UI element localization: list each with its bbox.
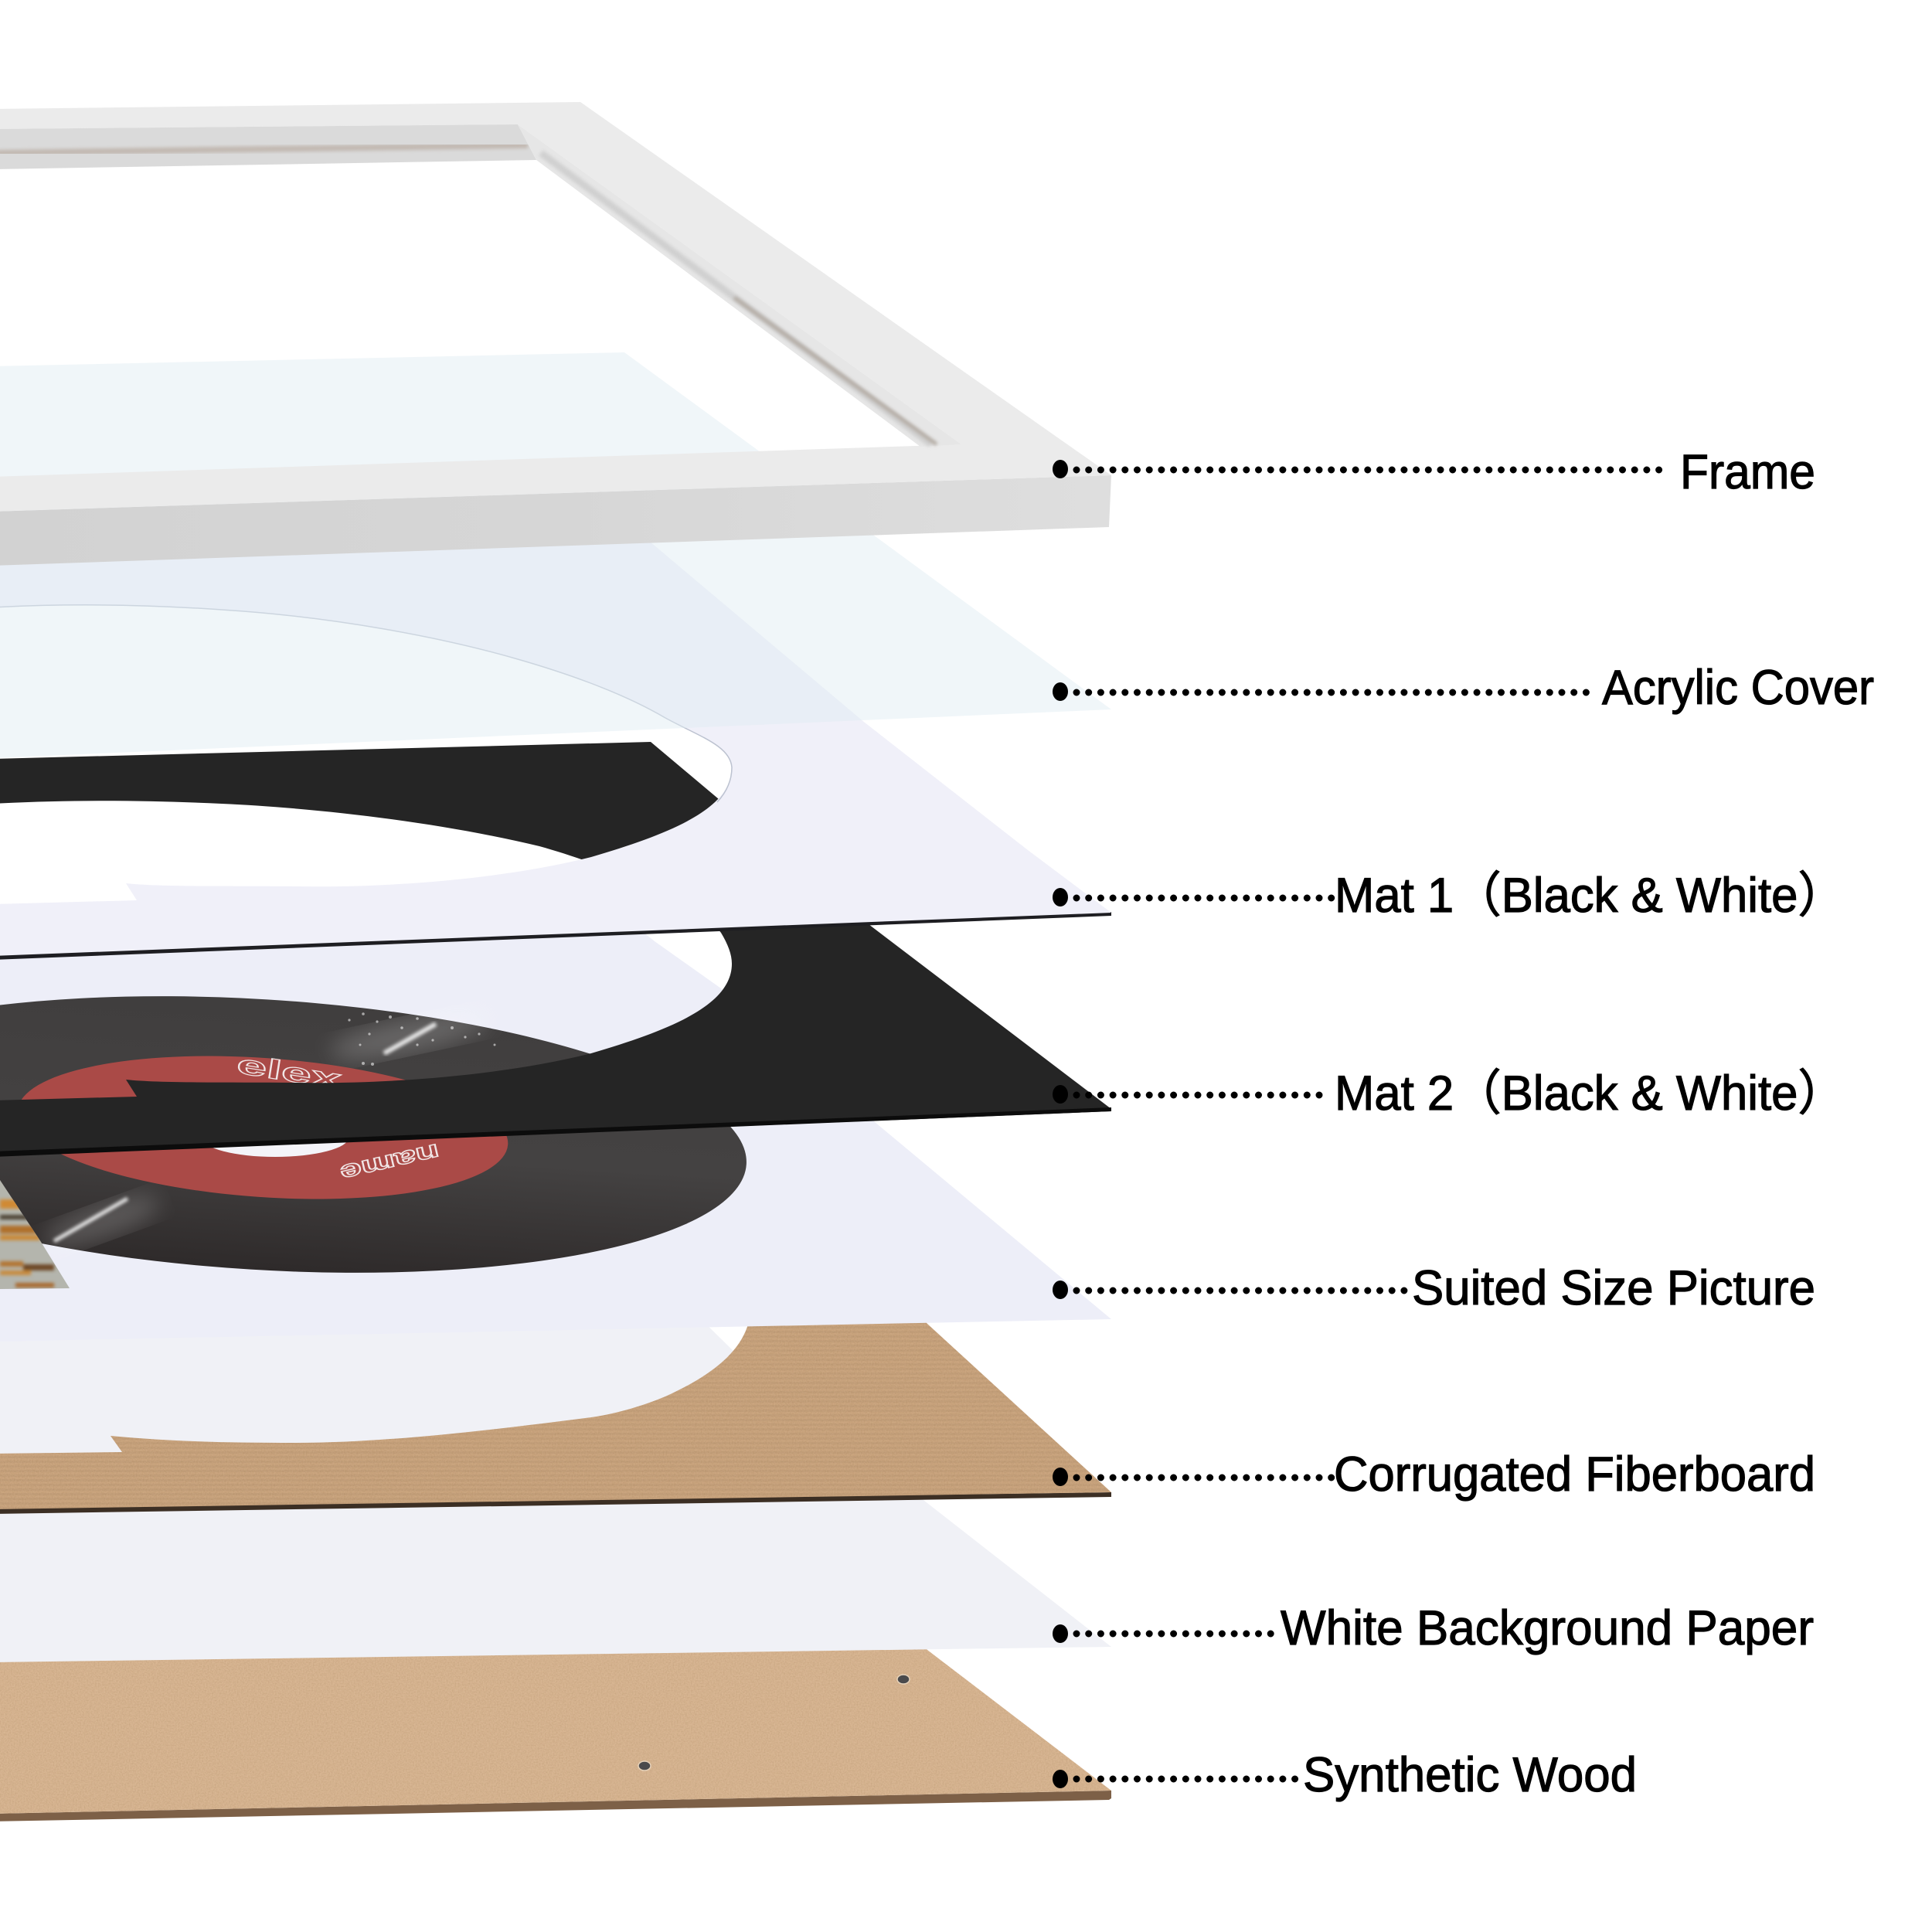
frame top face	[0, 102, 1111, 512]
icon: screw hole right	[897, 1675, 910, 1684]
panel: frame	[0, 102, 1111, 566]
marker dot	[1053, 1770, 1068, 1788]
callout: Corrugated Fiberboard	[1053, 1447, 1815, 1502]
record red label	[12, 1041, 513, 1214]
mat 2 lower edge	[0, 1107, 1111, 1157]
label: Mat 1（Black & White）	[1335, 869, 1845, 923]
panel: mat 1 white	[0, 532, 1111, 960]
label: Frame	[1680, 445, 1815, 499]
marker dot	[1053, 460, 1068, 478]
frame inner lip top	[0, 124, 536, 169]
frame front side	[0, 475, 1111, 566]
record top speckles	[348, 1012, 496, 1066]
corrugated edge	[0, 1492, 1111, 1514]
label: Synthetic Wood	[1303, 1748, 1637, 1802]
wood board side edge	[0, 1791, 1111, 1821]
callout: White Background Paper	[1053, 1601, 1814, 1655]
panel: corrugated fiberboard	[0, 1298, 1111, 1514]
icon: screw hole centre	[638, 1761, 651, 1770]
label: Suited Size Picture	[1412, 1261, 1815, 1315]
record top glare	[327, 1002, 492, 1069]
panel: synthetic wood backing board	[0, 1619, 1111, 1821]
photo mottled bands	[0, 1199, 54, 1287]
callout: Acrylic Cover	[1053, 661, 1874, 715]
corrugation ribs	[0, 1298, 1111, 1509]
corrugated face with window	[0, 1298, 1111, 1509]
leader	[1077, 1631, 1275, 1637]
label: White Background Paper	[1281, 1601, 1814, 1655]
record bottom glare	[36, 1185, 165, 1260]
record centre hole	[202, 1118, 349, 1157]
frame inner lip right grey band	[541, 153, 931, 444]
marker dot	[1053, 1468, 1068, 1486]
label: Corrugated Fiberboard	[1334, 1447, 1815, 1502]
leader	[1077, 1475, 1335, 1481]
frame inner lip right	[518, 124, 961, 447]
mat 1 underside line	[0, 912, 1111, 960]
mat 1 window outline	[0, 605, 732, 802]
panel: mat 2 black	[0, 742, 1111, 1157]
record disc	[0, 970, 755, 1299]
frame inner lip right dark line	[734, 298, 937, 444]
callout: Mat 1	[1053, 869, 1845, 923]
panel: suited size picture	[0, 912, 1111, 1342]
mat 1 sheet with window	[0, 532, 1111, 956]
marker dot	[1053, 888, 1068, 906]
callout: Frame	[1053, 445, 1815, 499]
leader	[1077, 1091, 1326, 1099]
leader	[1077, 1776, 1300, 1782]
mat 2 sheet with window	[0, 742, 1111, 1156]
photo base	[0, 1179, 71, 1291]
label text bottom: name	[338, 1139, 442, 1187]
panel: acrylic cover	[0, 352, 1111, 758]
callout: Synthetic Wood	[1053, 1748, 1637, 1802]
label: Acrylic Cover	[1602, 661, 1874, 715]
picture sheet	[0, 912, 1111, 1342]
photo corner	[0, 1179, 71, 1291]
leader	[1077, 689, 1587, 696]
marker dot	[1053, 682, 1068, 701]
record top highlight	[384, 1024, 436, 1053]
record bottom highlight	[54, 1199, 128, 1241]
leader	[1077, 1287, 1406, 1294]
leader	[1077, 467, 1664, 473]
callout: Mat 2	[1053, 1066, 1845, 1121]
marker dot	[1053, 1624, 1068, 1643]
label text top: elex	[235, 1049, 344, 1095]
marker dot	[1053, 1281, 1068, 1299]
callout: Suited Size Picture	[1053, 1261, 1815, 1315]
panel: white background paper	[0, 1314, 1111, 1662]
marker dot	[1053, 1085, 1068, 1104]
wood board top face	[0, 1619, 1111, 1814]
label: Mat 2（Black & White）	[1335, 1066, 1845, 1121]
leader	[1077, 895, 1334, 901]
vinyl record	[0, 970, 755, 1299]
frame inner lip top shadow line	[0, 145, 528, 153]
